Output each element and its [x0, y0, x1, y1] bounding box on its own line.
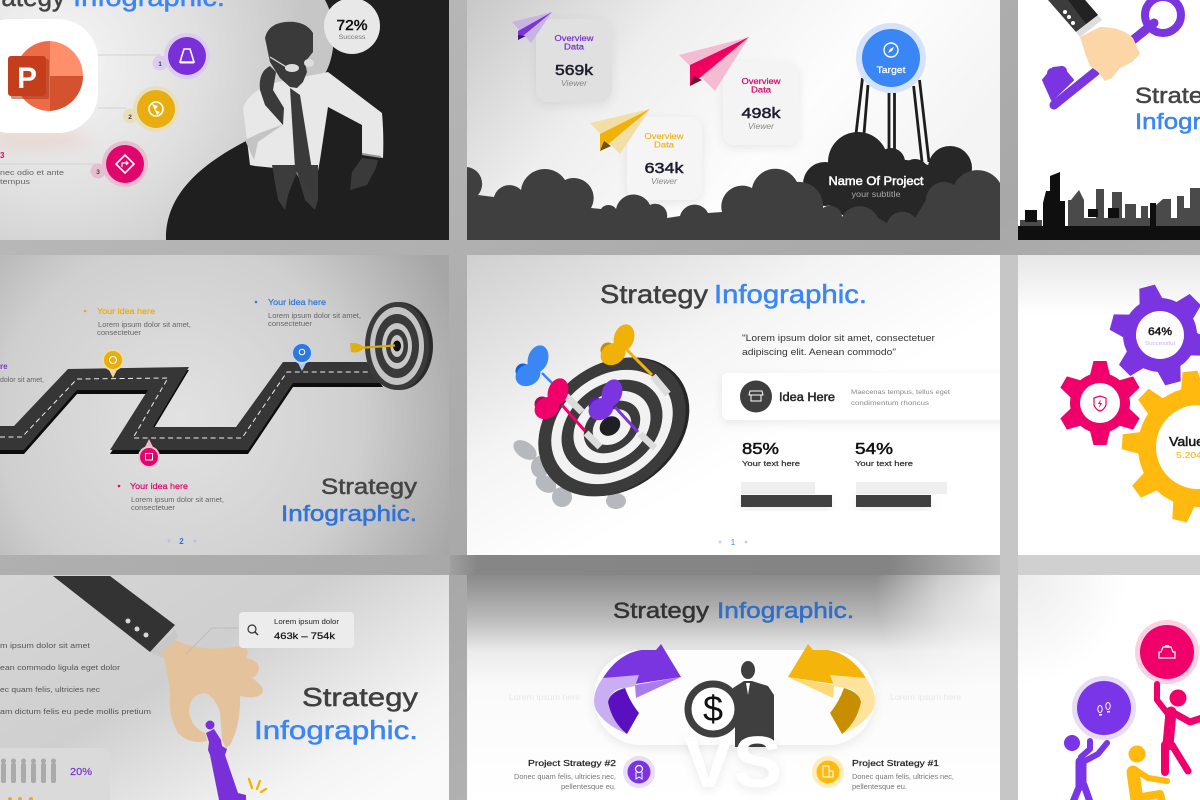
stat: 85%: 85% [742, 441, 779, 458]
text: yellow idea: Lorem ipsum dolor sit amet, [98, 322, 191, 329]
icon: PowerPoint logo [0, 19, 98, 149]
card: purple overview: 569k [555, 62, 594, 79]
text: strategy 2: Donec quam felis, ultricies nec, [514, 774, 616, 781]
title: Infographic. [254, 715, 418, 745]
panel: bottom-center slide with versus [467, 575, 1000, 800]
pagination [168, 538, 196, 544]
icon: dollar coin [688, 684, 738, 734]
gear: pink shield [1059, 361, 1141, 445]
card: purple overview: Overview [554, 34, 594, 43]
gear: yellow value [1121, 370, 1200, 523]
panel: middle-left slide with road [0, 255, 449, 555]
text: project name [828, 176, 924, 199]
icon: step 2 globe: 2 [128, 114, 132, 121]
card: people percent [0, 748, 110, 800]
icon: purple footprints circle [1072, 676, 1136, 740]
text: purple idea [0, 364, 44, 383]
stat: 54%: 54% [855, 441, 893, 458]
icon: store [740, 380, 772, 412]
icon: strategy 1 building [812, 756, 844, 788]
stat: 54% [855, 441, 913, 468]
card: idea here: Idea Here [779, 392, 835, 404]
text: pink idea: Lorem ipsum dolor sit amet, [131, 497, 224, 504]
icon: blue dart [511, 343, 582, 412]
title [613, 598, 854, 623]
stat: 85%: Your text here [742, 459, 800, 468]
bar chart: comparison bars [741, 482, 947, 507]
figure: pink person [1157, 684, 1200, 772]
clouds: front layer [467, 167, 1000, 240]
icon: target compass badge: Target [876, 65, 906, 75]
list text [0, 641, 151, 716]
card: purple overview: Data [564, 42, 585, 52]
title: Strategy [321, 474, 417, 499]
text: point 3: tempus [0, 177, 30, 186]
icon: dark sleeve [53, 576, 178, 658]
list text: am dictum felis eu pede mollis pretium [0, 707, 151, 716]
text: point 3 [0, 151, 64, 186]
panel: middle-right slide with gears [1018, 255, 1200, 555]
silhouette: businessman [243, 22, 383, 210]
dark curved background [166, 0, 449, 240]
dart shadows [510, 436, 626, 509]
card: idea here [722, 373, 1022, 420]
icon: yellow dart [350, 343, 395, 352]
title: Infographic. [281, 501, 417, 526]
title [1135, 83, 1200, 134]
icon: dollar coin: $ [703, 688, 723, 729]
pin: pink idea [138, 439, 160, 468]
stat: 54%: Your text here [855, 459, 913, 468]
card: idea here: condimentum rhoncus [851, 400, 930, 407]
icon: pink taxi circle [1135, 620, 1199, 684]
text: blue idea: Lorem ipsum dolor sit amet, [268, 313, 361, 320]
text: strategy 1: Donec quam felis, ultricies nec, [852, 774, 954, 781]
quote: adipiscing elit. Aenean commodo" [742, 347, 896, 357]
pagination: 1 [731, 538, 736, 547]
panel: top-left slide with executive [0, 0, 449, 240]
text: point 3: 3 [0, 151, 5, 160]
icon: target compass badge [856, 23, 926, 93]
text: purple idea: dolor sit amet, [0, 377, 44, 384]
pagination [718, 538, 748, 547]
icon: yellow dart [596, 322, 668, 394]
icon: purple chess piece [206, 720, 246, 800]
card: pink overview: Overview [742, 77, 781, 86]
icon: pink paper plane [679, 37, 749, 91]
gear: yellow value: 5.204 [1176, 451, 1200, 460]
text: strategy 1: Project Strategy #1 [852, 758, 939, 768]
text: point 3: nec odio et ante [0, 168, 64, 177]
icon: purple arrow [594, 644, 681, 734]
dartboard [511, 327, 717, 527]
text: yellow idea: consectetuer [97, 330, 142, 337]
card: yellow overview: 634k [644, 160, 684, 177]
pagination: 2 [179, 537, 184, 546]
panel: top-right slide with key [1018, 0, 1200, 240]
icon: step 1 cone [152, 33, 210, 79]
icon: step 3 road sign: 3 [96, 169, 100, 176]
gear: purple 64%: Successful [1145, 341, 1175, 347]
icon: step 3 road sign [90, 141, 148, 187]
icon: purple dart [584, 377, 655, 448]
gear: purple 64%: 64% [1148, 326, 1172, 338]
panel: bottom-right slide with people [1018, 575, 1200, 800]
badge: 72% success: 72% [336, 17, 368, 34]
icon: pink dart [530, 376, 600, 447]
badge: 72% success: Success [338, 34, 366, 41]
pin: yellow idea [102, 349, 124, 378]
callout: range card [185, 612, 354, 655]
connector lines [0, 55, 160, 164]
title [0, 0, 225, 12]
text: strategy 2: Project Strategy #2 [528, 758, 616, 768]
list text: ean commodo ligula eget dolor [0, 663, 121, 672]
faint side labels: Lorem ipsum here [890, 693, 962, 702]
text: blue idea: consectetuer [268, 321, 313, 328]
badge: 72% success [324, 0, 380, 54]
text: yellow idea: Your idea here [97, 307, 156, 316]
road [0, 362, 383, 454]
callout: range card: 463k – 754k [274, 631, 335, 642]
text: strategy 1 [852, 758, 954, 791]
icon: yellow arrow [788, 644, 875, 734]
panel: middle-center main slide [467, 255, 1022, 555]
card: purple overview [536, 34, 612, 106]
dartboard target [365, 302, 433, 390]
callout: range card: Lorem ipsum dolor [274, 619, 340, 626]
card: people percent: 20% [70, 766, 92, 778]
title: Infographic. [717, 598, 854, 623]
card: pink overview: 498k [742, 105, 781, 122]
beams to target [856, 78, 929, 162]
icon: strategy 2 ribbon [623, 756, 655, 788]
panel: bottom-left slide with hand and chess piece [0, 575, 449, 800]
clouds: back dark layer [803, 132, 972, 225]
text: strategy 2: pellentesque eu. [561, 784, 616, 791]
title [281, 474, 417, 526]
white pill [594, 650, 875, 745]
icon: purple paper plane [512, 12, 552, 43]
figure: yellow person [1128, 746, 1167, 800]
figure: purple person [1064, 735, 1107, 800]
card: pink overview: Data [751, 86, 772, 94]
card: yellow overview [627, 117, 702, 200]
faint side labels: Lorem ipsum here [509, 693, 581, 702]
title [600, 279, 867, 309]
card: yellow overview: Overview [644, 132, 684, 141]
text: yellow idea [84, 307, 191, 337]
card: yellow overview: Viewer [651, 177, 677, 186]
icon: yellow sparks [249, 779, 266, 792]
card: purple overview: Viewer [561, 79, 587, 88]
text: project name: Name Of Project [828, 176, 924, 188]
icon: purple key in hand [1043, 0, 1181, 105]
panel: top-center slide with paper planes [467, 0, 1000, 240]
illustration: city skyline [1018, 172, 1200, 240]
icon: step 2 globe [122, 86, 179, 132]
text: pink idea: consectetuer [131, 505, 176, 512]
title [254, 682, 418, 745]
pin: blue idea [291, 342, 313, 371]
gear: purple 64% [1109, 284, 1200, 386]
quote [742, 333, 935, 357]
title: Infographic. [714, 279, 867, 309]
title: Strategy [302, 682, 418, 712]
text: blue idea: Your idea here [268, 298, 327, 307]
icon: yellow paper plane [590, 109, 650, 154]
text: strategy 2 [514, 758, 616, 791]
faint side labels [509, 693, 962, 702]
text: pink idea: Your idea here [130, 482, 189, 491]
card: pink overview [723, 62, 799, 145]
list text: ec quam felis, ultricies nec [0, 685, 100, 694]
icon: PowerPoint logo: P [17, 62, 37, 95]
silhouette: businessman in suit [733, 661, 774, 747]
text: pink idea [118, 482, 224, 512]
list text: m ipsum dolor sit amet [0, 641, 91, 650]
stat: 85% [742, 441, 800, 468]
title: Strategy [600, 279, 708, 309]
text: project name: your subtitle [852, 190, 901, 199]
text: blue idea [255, 298, 361, 328]
card: idea here: Maecenas tempus, tellus eget [851, 389, 950, 396]
card: yellow overview: Data [654, 140, 675, 150]
quote: "Lorem ipsum dolor sit amet, consectetuer [742, 333, 935, 343]
card: pink overview: Viewer [748, 122, 774, 131]
text: strategy 1: pellentesque eu. [852, 784, 907, 791]
text: purple idea: re [0, 362, 8, 371]
icon: hand [162, 640, 263, 748]
title: Strategy [613, 598, 709, 623]
icon: step 1 cone: 1 [158, 61, 162, 68]
